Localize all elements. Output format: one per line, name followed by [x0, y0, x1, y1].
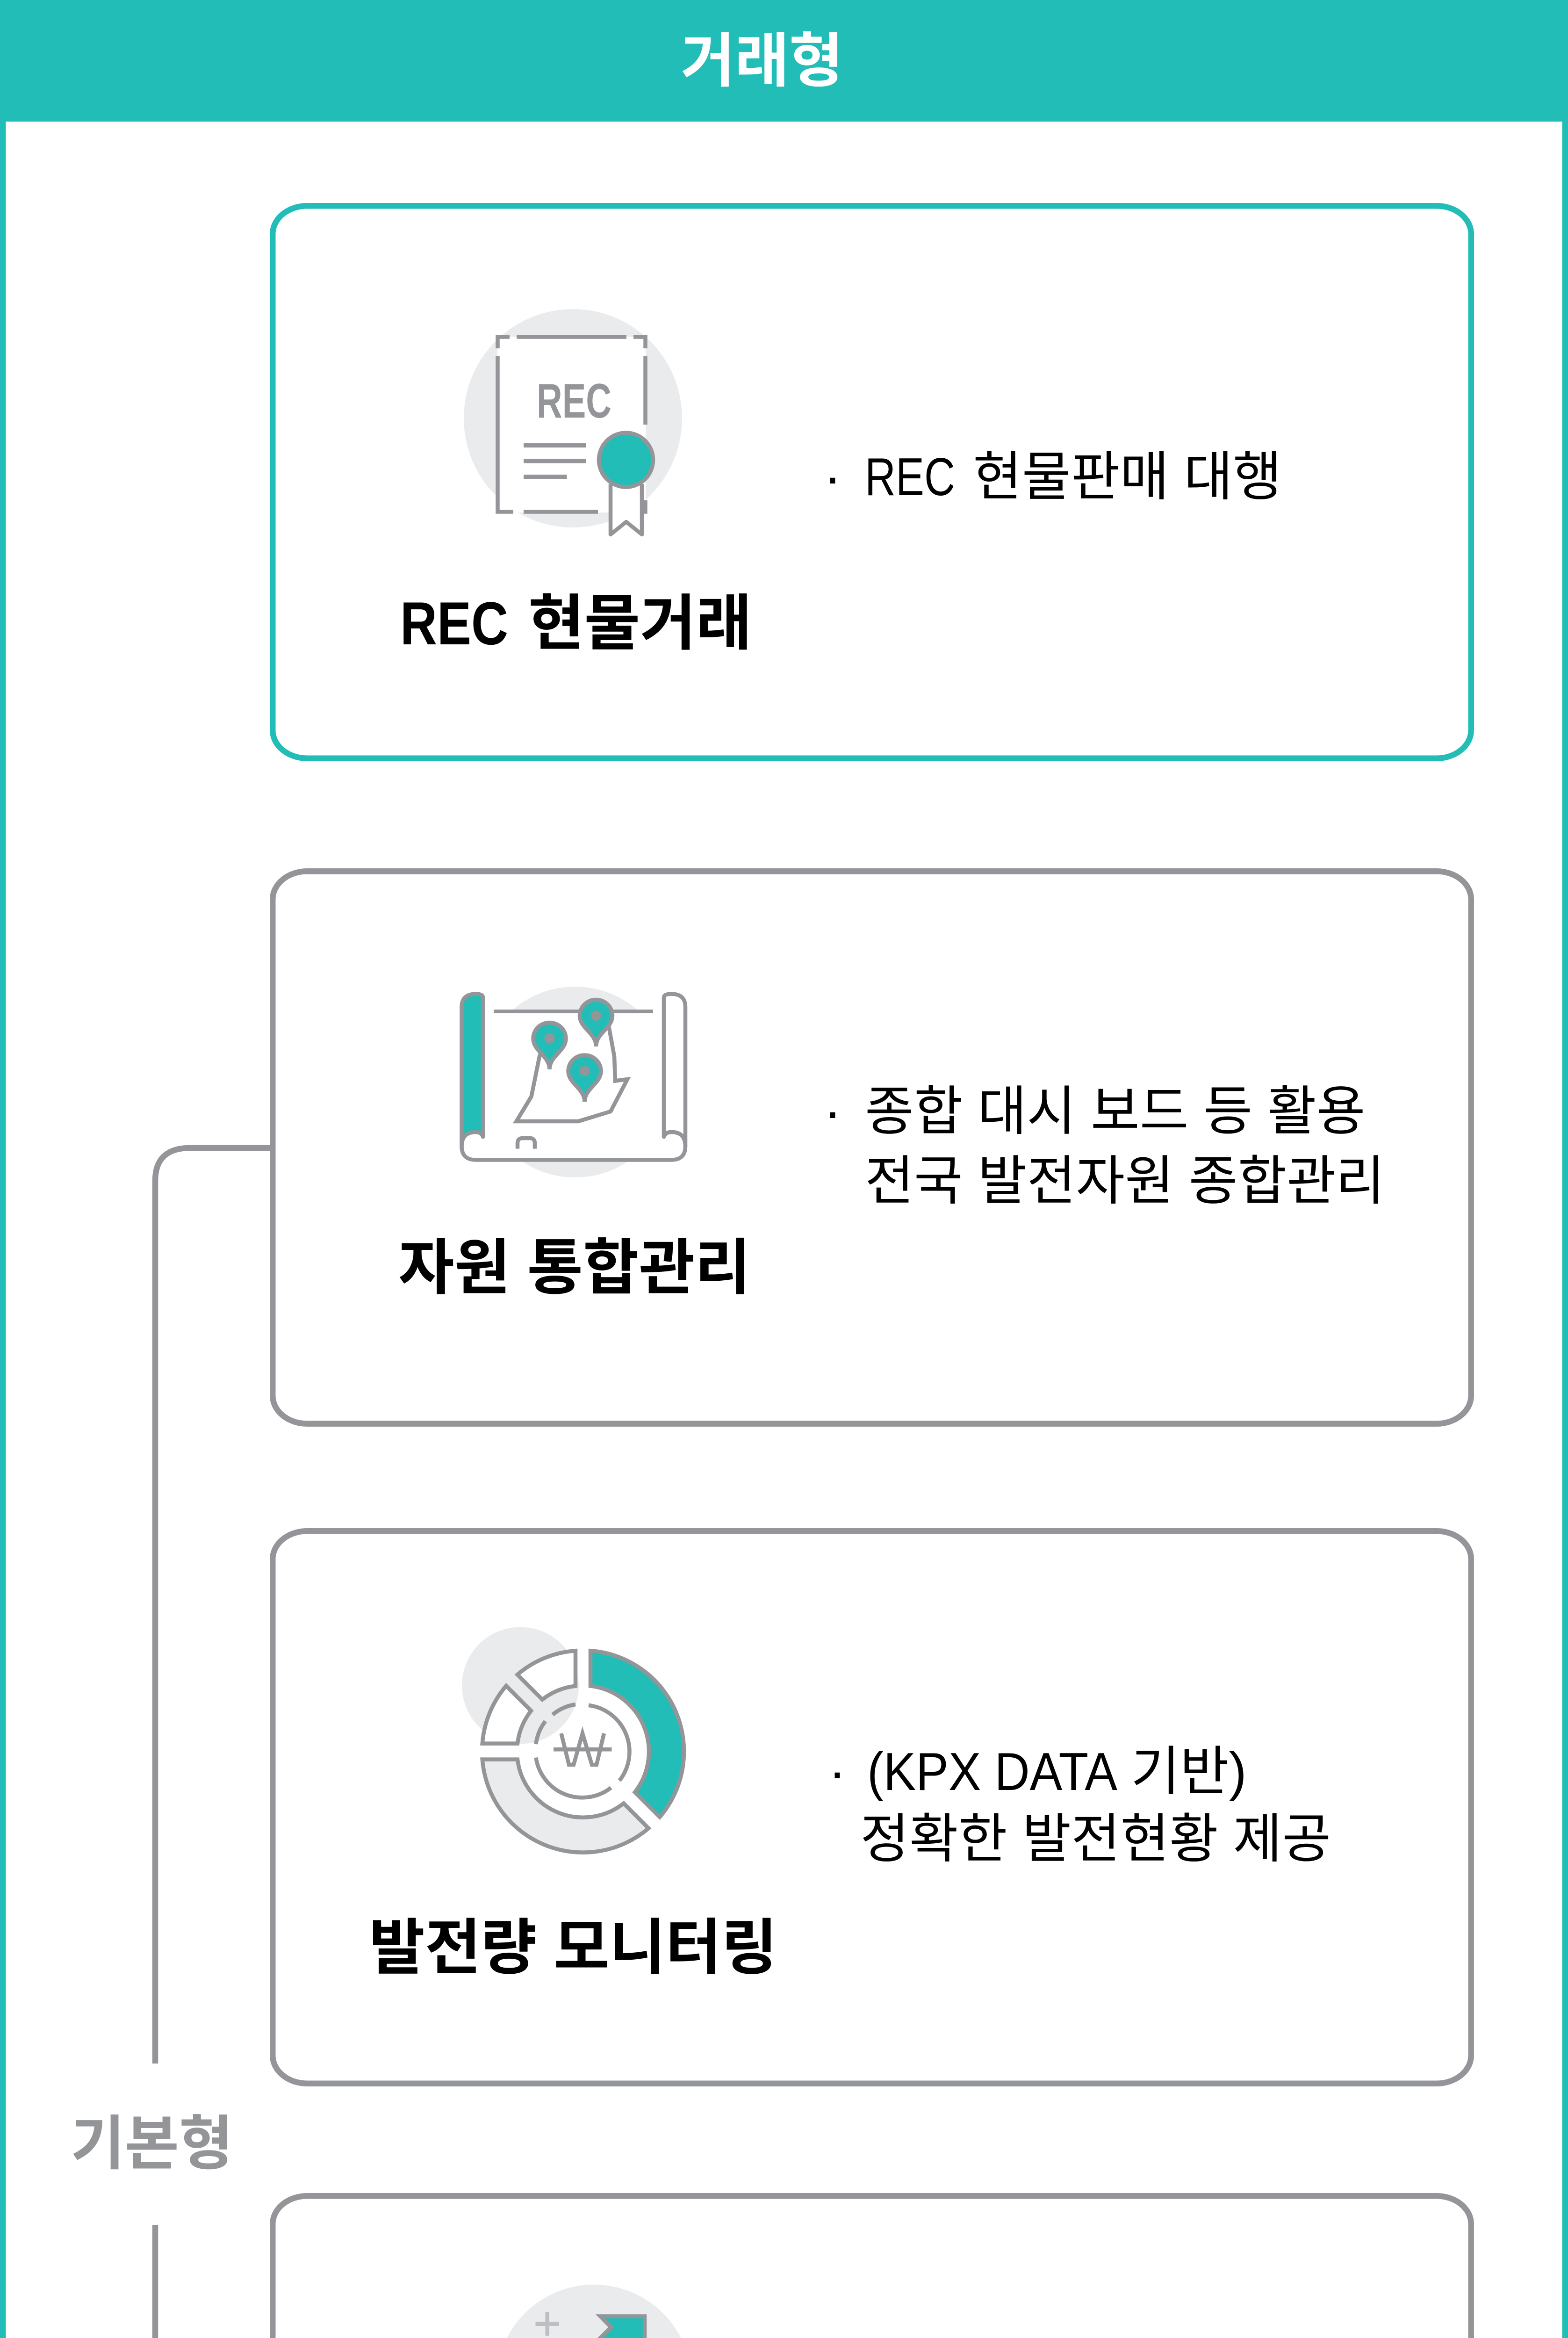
title: 발전량 모니터링: 발전량 모니터링 [369, 1913, 777, 1982]
pin 2 [580, 1000, 612, 1046]
icon: map scroll with pins [462, 987, 685, 1177]
title: REC 현물거래 [400, 589, 752, 657]
pin 3 [568, 1055, 601, 1102]
description [828, 1742, 1331, 1869]
description: REC [865, 447, 955, 507]
description [824, 1082, 1385, 1211]
icon: REC certificate: REC [537, 374, 611, 428]
description: (KPX DATA [867, 1742, 1117, 1802]
panel: 발전량 모니터링 [273, 1531, 1471, 2084]
description: · [824, 447, 842, 507]
description [824, 447, 1282, 507]
title: REC 현물거래: 현물거래 [528, 589, 752, 657]
title: 거래형: 거래형 [681, 28, 843, 94]
pin 1 [533, 1023, 566, 1069]
header band with title [0, 0, 1568, 122]
panel: REC 현물거래 [273, 206, 1471, 758]
description: 기반) [1131, 1742, 1247, 1802]
description: · [828, 1742, 846, 1802]
description: 현물판매 대행 [973, 447, 1282, 507]
description: 정확한 발전현황 제공 [860, 1810, 1331, 1869]
label: 기본형: 기본형 [71, 2111, 233, 2177]
panel: 자원 통합관리 [273, 871, 1471, 1424]
panel: 발전수익 관리 [273, 2196, 1471, 2338]
icon: rising arrow and bars [446, 2285, 696, 2338]
icon: REC certificate [464, 309, 682, 534]
description: 전국 발전자원 종합관리 [865, 1152, 1385, 1211]
icon: donut chart with won sign [462, 1627, 684, 1853]
description: · [824, 1082, 842, 1141]
title: 자원 통합관리: 자원 통합관리 [398, 1234, 751, 1302]
connector bracket: 기본형 [155, 1148, 270, 2338]
title: REC 현물거래: REC [400, 589, 508, 657]
description: 종합 대시 보드 등 활용 [865, 1082, 1366, 1141]
